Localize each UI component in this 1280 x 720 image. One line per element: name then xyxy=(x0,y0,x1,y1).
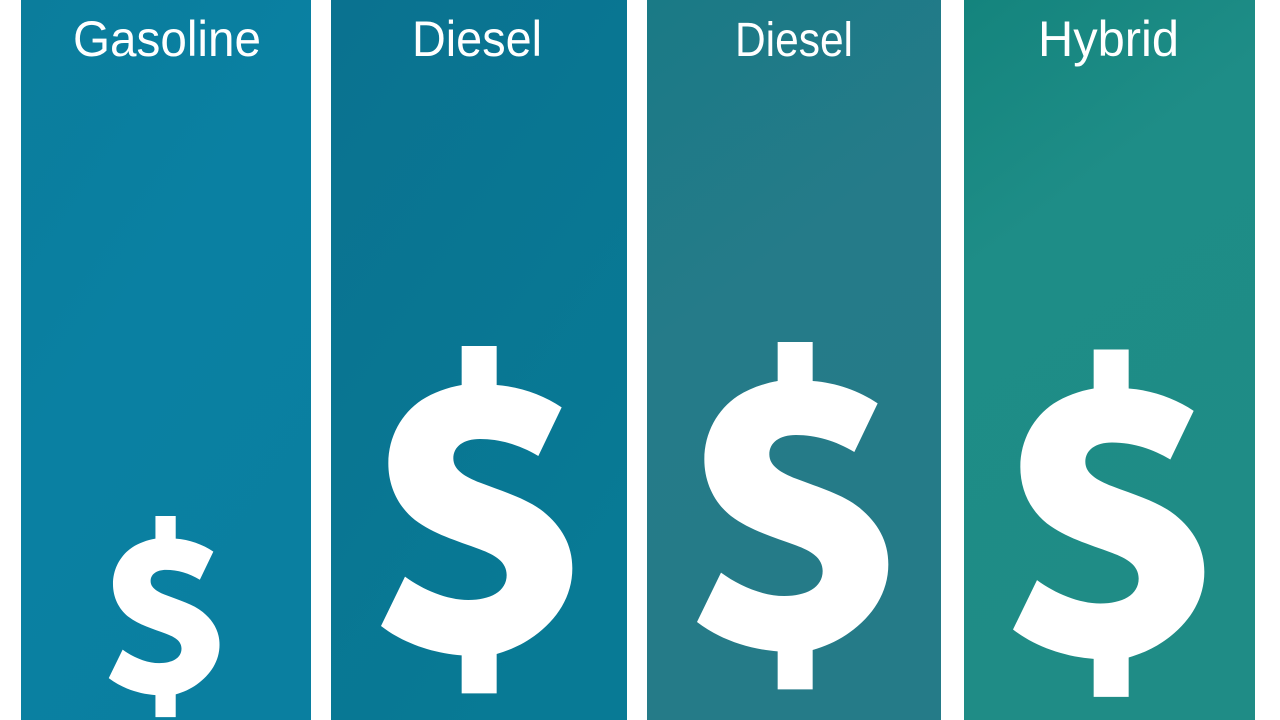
panel background: diesel 2 xyxy=(647,0,941,720)
panel: hybrid xyxy=(964,0,1255,720)
icon: large dollar sign xyxy=(697,342,888,689)
panel: diesel 1 xyxy=(331,0,627,720)
icon: large dollar sign xyxy=(381,346,572,693)
panel background: diesel 1 xyxy=(331,0,627,720)
icon: large dollar sign xyxy=(1013,349,1204,697)
heading: Gasoline: Gasoline xyxy=(73,11,261,67)
icon: small dollar sign xyxy=(109,516,220,717)
heading: Diesel: Diesel xyxy=(412,11,542,67)
heading: Diesel: Diesel xyxy=(735,14,853,67)
panel background: gasoline xyxy=(21,0,311,720)
heading: Hybrid: Hybrid xyxy=(1038,11,1179,67)
panel background: hybrid xyxy=(964,0,1255,720)
panel: diesel 2 xyxy=(647,0,941,720)
panel: gasoline xyxy=(21,0,311,720)
